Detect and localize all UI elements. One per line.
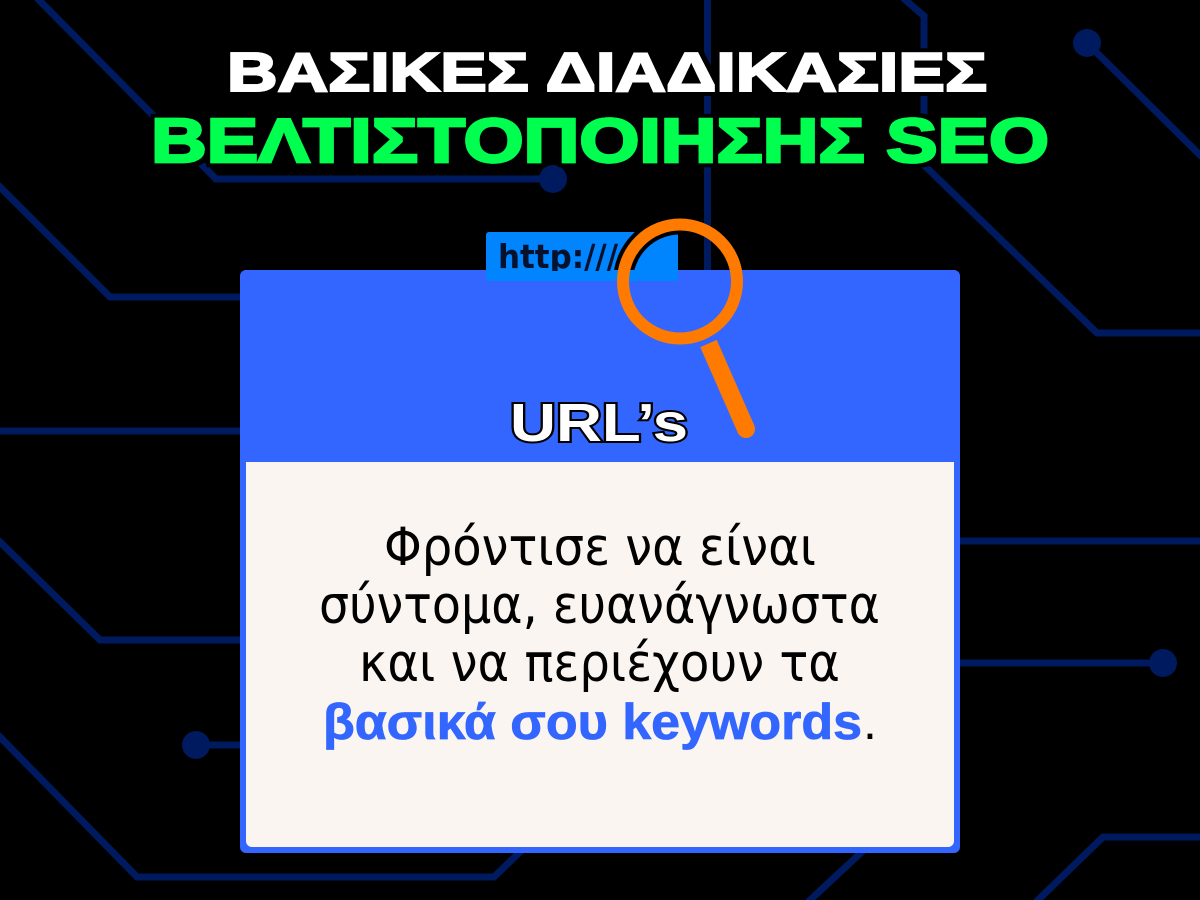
body text bbox=[319, 517, 880, 750]
title line 2: ΒΕΛΤΙΣΤΟΠΟΙΗΣΗΣ SEO bbox=[151, 107, 1049, 176]
icon: magnifying glass bbox=[623, 224, 755, 438]
card bbox=[240, 270, 960, 853]
title bbox=[151, 41, 1049, 176]
body line 2: σύντομα, ευανάγνωστα bbox=[319, 575, 880, 636]
body line 4: βασικά σου keywords bbox=[323, 694, 862, 750]
body line 1: Φρόντισε να είναι bbox=[384, 517, 816, 578]
body line 4: . bbox=[863, 694, 877, 750]
card body bbox=[246, 462, 954, 847]
url tab bbox=[486, 232, 678, 281]
url text: http:/// bbox=[498, 237, 619, 276]
body line 3: και να περιέχουν τα bbox=[359, 633, 840, 694]
card header bbox=[240, 270, 960, 853]
card heading: URL’s bbox=[510, 393, 688, 453]
title line 1: ΒΑΣΙΚΕΣ ΔΙΑΔΙΚΑΣΙΕΣ bbox=[227, 41, 987, 103]
